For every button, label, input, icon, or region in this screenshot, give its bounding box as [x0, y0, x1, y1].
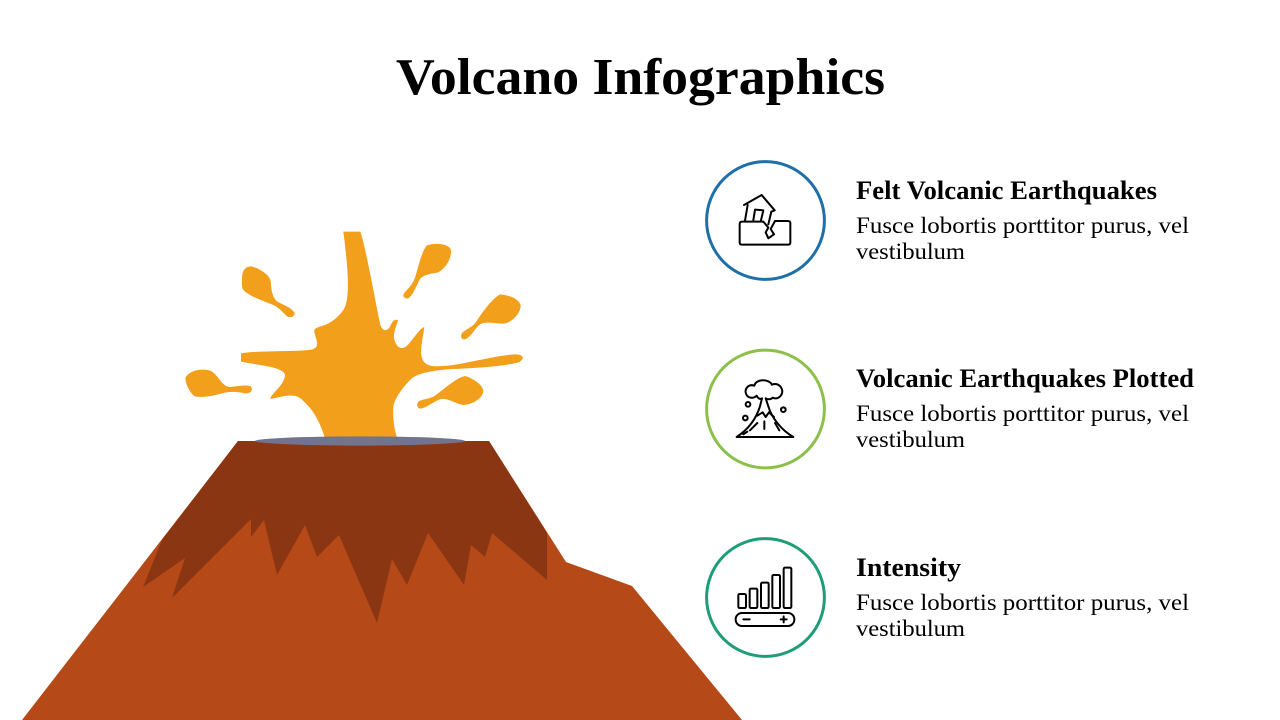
crater [255, 436, 465, 446]
text block [856, 590, 1189, 641]
text block [856, 401, 1189, 452]
lava blob: upper right [403, 244, 451, 299]
text block: vestibulum [856, 239, 965, 264]
text block: vestibulum [856, 616, 965, 641]
circle: blue [707, 162, 824, 279]
text block: Fusce lobortis porttitor purus, vel [856, 590, 1189, 615]
lava blob: right [461, 294, 521, 339]
heading: Volcanic Earthquakes Plotted [856, 364, 1195, 393]
text block: vestibulum [856, 427, 965, 452]
circle: teal [707, 539, 824, 656]
title: Volcano Infographics [396, 49, 885, 106]
volcano dark upper slope [143, 441, 547, 623]
icon: intensity bars [736, 568, 794, 626]
lava blob: upper left [242, 266, 295, 317]
lava eruption [185, 232, 523, 438]
circle: green [707, 350, 824, 468]
text block: Fusce lobortis porttitor purus, vel [856, 213, 1189, 238]
icon: cracked house [740, 195, 790, 245]
heading: Intensity [856, 553, 961, 582]
item: intensity [707, 539, 1189, 656]
lava blob: left [185, 370, 252, 397]
lava main plume [241, 232, 523, 438]
heading: Felt Volcanic Earthquakes [856, 176, 1157, 205]
lava blob: lower right [417, 376, 483, 409]
volcano illustration [22, 232, 742, 720]
text block: Fusce lobortis porttitor purus, vel [856, 401, 1189, 426]
item: volcanic earthquakes plotted [707, 350, 1195, 468]
item: felt volcanic earthquakes [707, 162, 1189, 279]
icon: erupting volcano [737, 380, 793, 437]
text block [856, 213, 1189, 264]
volcano body [22, 441, 742, 720]
